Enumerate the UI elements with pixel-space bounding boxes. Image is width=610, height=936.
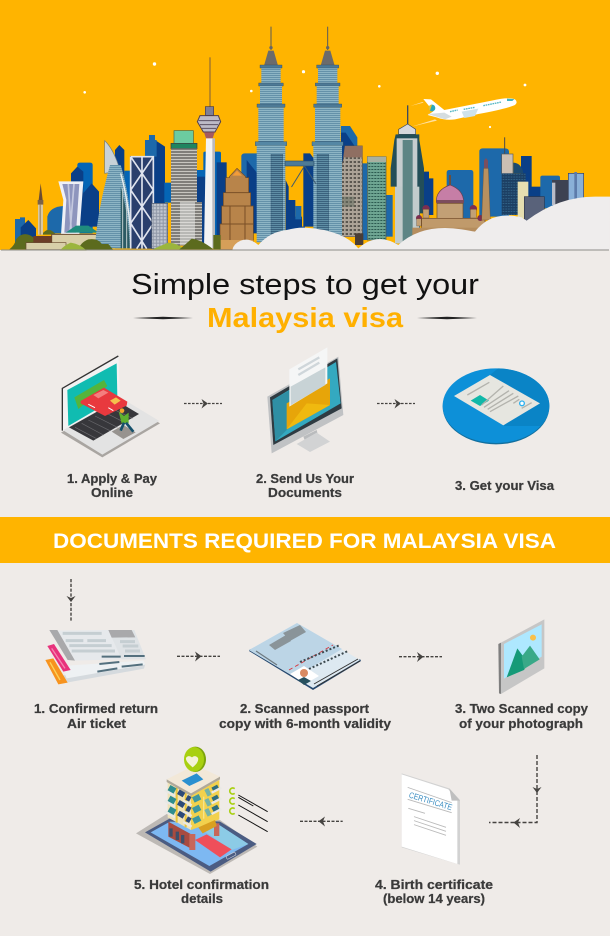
icon: birth certificate	[402, 773, 460, 865]
step labels: 1. Apply & Pay	[67, 471, 158, 486]
arrow: step 2 to 3	[377, 399, 415, 408]
sky bridge	[285, 161, 316, 187]
cross-braced tower	[130, 156, 154, 249]
wave tower	[58, 181, 83, 235]
document labels row two: 4. Birth certificate	[375, 877, 493, 892]
icon: birth certificate: CERTIFICATE	[408, 790, 454, 812]
arrow: ticket to passport	[177, 652, 220, 662]
heading: Malaysia visa with ornamental rules: Malaysia visa	[207, 302, 403, 333]
arrow: passport to photo	[399, 652, 442, 662]
document labels row one	[34, 701, 589, 731]
arrow: step 1 to 2	[184, 399, 222, 408]
step labels: 2. Send Us Your	[256, 471, 354, 486]
KL tower	[197, 57, 221, 248]
ground line	[1, 250, 609, 251]
skyline left part	[9, 57, 305, 251]
bullet skyscraper	[95, 141, 132, 248]
airplane	[410, 98, 517, 127]
skyline right part	[303, 105, 584, 245]
document labels row two: (below 14 years)	[383, 891, 485, 906]
header panel: yellow sky with city skyline	[0, 0, 610, 251]
stars	[83, 62, 526, 128]
document labels row one: copy with 6-month validity	[219, 716, 392, 731]
minaret	[38, 183, 43, 235]
tan tower	[337, 146, 362, 237]
right cluster towers	[502, 137, 584, 221]
icon: passport	[249, 623, 361, 690]
document labels row one: 2. Scanned passport	[240, 701, 370, 716]
document labels row one: 3. Two Scanned copy	[455, 701, 589, 716]
low pavilion with teal roof	[26, 226, 102, 250]
step labels	[67, 471, 555, 500]
icon: photograph	[498, 619, 544, 694]
title: Simple steps to get your: Simple steps to get your	[131, 269, 479, 301]
step labels: Online	[91, 485, 133, 500]
green tower	[367, 157, 386, 240]
grey striped tower	[171, 131, 202, 246]
document labels row two: details	[181, 891, 223, 906]
Petronas left tower	[255, 27, 287, 242]
trees front	[78, 239, 113, 250]
icon: hotel on tablet	[136, 747, 268, 874]
Petronas right tower	[312, 27, 343, 242]
document labels row two: 5. Hotel confirmation	[134, 877, 269, 892]
arrow: down to first document	[66, 579, 76, 622]
arrow: elbow from photo to certificate	[489, 755, 542, 828]
icon: laptop with credit card	[61, 356, 160, 457]
small grid building	[152, 203, 168, 249]
icon: visa document on blue disc	[443, 367, 553, 444]
document labels row one: 1. Confirmed return	[34, 701, 158, 716]
clouds	[232, 197, 610, 250]
arrow: certificate to hotel	[300, 816, 343, 826]
mosque	[412, 175, 486, 235]
icon: air tickets	[45, 630, 146, 684]
step labels: Documents	[268, 485, 342, 500]
trees left	[9, 234, 39, 249]
document labels row one: of your photograph	[459, 716, 583, 731]
slim minaret	[482, 158, 490, 220]
document labels row one: Air ticket	[67, 716, 127, 731]
brown stepped building	[220, 168, 253, 249]
pinnacle tower	[391, 105, 424, 243]
icon: monitor with envelope	[267, 347, 343, 453]
banner: documents required	[0, 517, 610, 563]
step labels: 3. Get your Visa	[455, 478, 555, 493]
document labels row two	[134, 877, 493, 906]
banner: documents required: DOCUMENTS REQUIRED FOR MALAYSIA VISA	[53, 530, 556, 553]
